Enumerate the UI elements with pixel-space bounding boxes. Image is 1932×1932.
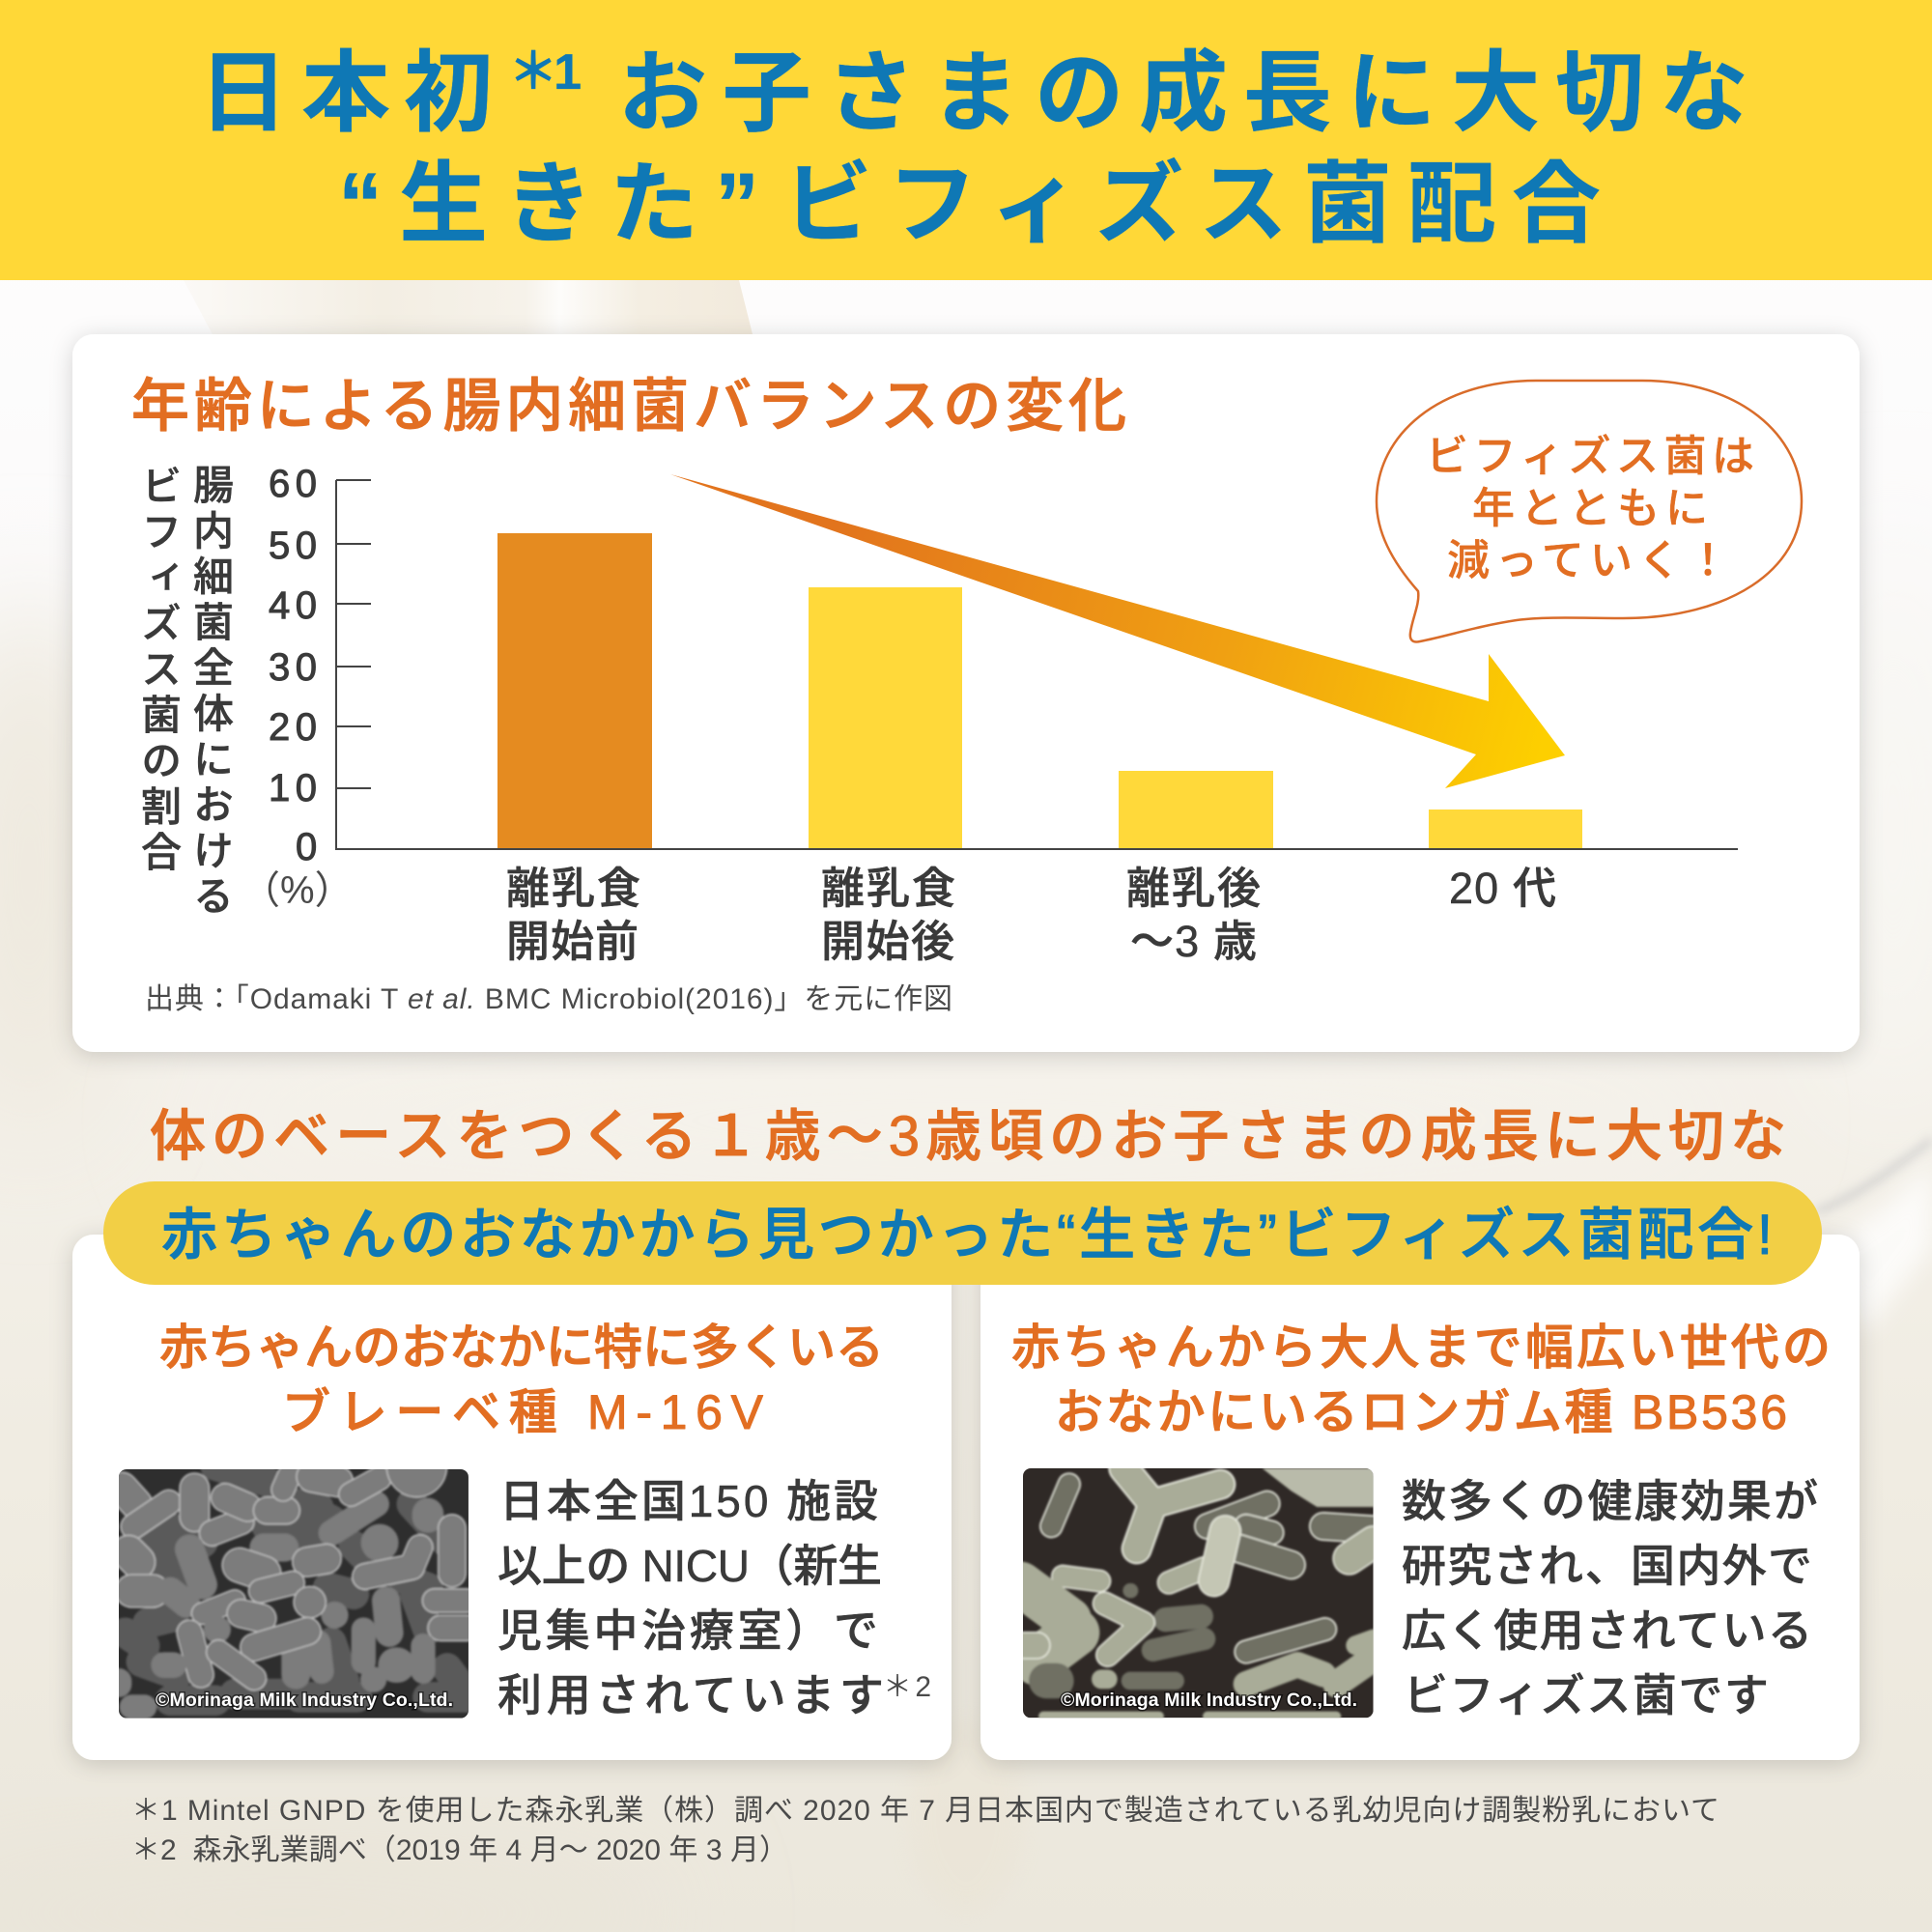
title line 1: 日本初 — [199, 44, 493, 143]
footnotes: ＊2 森永乳業調べ（2019 年 4 月～ 2020 年 3 月） — [131, 1834, 788, 1866]
micrograph: Breve — [119, 1465, 469, 1719]
decline arrow — [670, 474, 1565, 788]
panel heading: おなかにいるロンガム種 BB536 — [1055, 1385, 1787, 1439]
panel heading — [159, 1321, 884, 1439]
y-axis tick labels: 20 — [269, 706, 317, 749]
panel: Breve M-16V — [72, 1235, 952, 1760]
y-axis tick labels: （%） — [242, 869, 354, 912]
callout pill — [103, 1181, 1822, 1285]
panel body text: 研究され、国内外で — [1402, 1541, 1812, 1591]
panel heading: ブレーベ種 M-16V — [282, 1385, 764, 1439]
y-axis title: 腸内細菌全体における — [187, 464, 234, 921]
x-axis labels — [506, 864, 1556, 966]
bar chart — [497, 533, 1582, 849]
speech bubble: 年とともに — [1472, 485, 1708, 532]
panel body text: 以上の NICU（新生 — [497, 1541, 882, 1591]
panel body text — [497, 1476, 931, 1720]
subheading: 体のベースをつくる１歳～3歳頃のお子さまの成長に大切な — [150, 1105, 1786, 1168]
x-axis labels: 離乳食 — [506, 864, 640, 913]
x-axis labels: 離乳後 — [1126, 864, 1261, 913]
y-axis tick labels: 0 — [296, 826, 317, 868]
panel body text: 利用されています — [497, 1670, 884, 1720]
copyright caption: ©Morinaga Milk Industry Co.,Ltd. — [1061, 1690, 1357, 1711]
panel: Longum BB536 — [980, 1235, 1860, 1760]
panel body text: ビフィズス菌です — [1404, 1670, 1769, 1720]
panel body text: 児集中治療室）で — [497, 1605, 878, 1656]
speech bubble — [1377, 381, 1802, 642]
y-axis title: ビフィズス菌の割合 — [135, 465, 182, 877]
y-axis title — [135, 464, 234, 921]
panel heading: 赤ちゃんから大人まで幅広い世代の — [1011, 1321, 1831, 1375]
title line 2 — [338, 156, 1601, 254]
title line 1: お子さまの成長に大切な — [618, 44, 1748, 143]
axes — [336, 480, 1738, 849]
y-axis tick labels: 50 — [269, 525, 317, 567]
x-axis labels: 開始後 — [821, 917, 954, 966]
title line 2: ビフィズス菌配合 — [783, 156, 1601, 254]
callout pill: 赤ちゃんのおなかから見つかった“生きた”ビフィズス菌配合! — [161, 1204, 1773, 1266]
speech bubble: 減っていく！ — [1447, 537, 1729, 584]
source note: 出典：「Odamaki T et al. BMC Microbiol(2016)」を元に作図 — [145, 983, 952, 1015]
header band — [0, 0, 1932, 280]
copyright caption: ©Morinaga Milk Industry Co.,Ltd. — [156, 1690, 453, 1711]
panel heading: 赤ちゃんのおなかに特に多くいる — [159, 1321, 884, 1375]
panel heading — [1011, 1321, 1831, 1439]
x-axis labels: 開始前 — [506, 917, 639, 966]
y-axis tick labels: 10 — [269, 767, 317, 810]
panel body text: ＊2 — [883, 1671, 931, 1703]
micrograph: Longum — [1021, 1468, 1375, 1718]
title line 2: “生きた” — [338, 156, 759, 254]
panel body text: 数多くの健康効果が — [1402, 1476, 1818, 1526]
footnotes — [131, 1795, 1719, 1866]
y-axis tick labels: 60 — [269, 463, 317, 505]
y-axis tick labels — [242, 463, 354, 912]
title line 1: ＊1 — [508, 44, 582, 100]
panel: age chart — [72, 334, 1860, 1052]
panel body text: 広く使用されている — [1402, 1605, 1812, 1656]
y-axis tick labels: 40 — [269, 584, 317, 627]
y-axis tick labels: 30 — [269, 646, 317, 689]
chart heading: 年齢による腸内細菌バランスの変化 — [131, 374, 1126, 439]
speech bubble: ビフィズス菌は — [1426, 433, 1754, 480]
x-axis labels: 20 代 — [1449, 864, 1556, 913]
x-axis labels: 離乳食 — [821, 864, 955, 913]
footnotes: ＊1 Mintel GNPD を使用した森永乳業（株）調べ 2020 年 7 月日本国内で製造されている乳幼児向け調製粉乳において — [131, 1795, 1719, 1827]
x-axis labels: ～3 歳 — [1130, 917, 1257, 966]
panel body text: 日本全国150 施設 — [499, 1476, 878, 1526]
panel body text — [1402, 1476, 1818, 1720]
